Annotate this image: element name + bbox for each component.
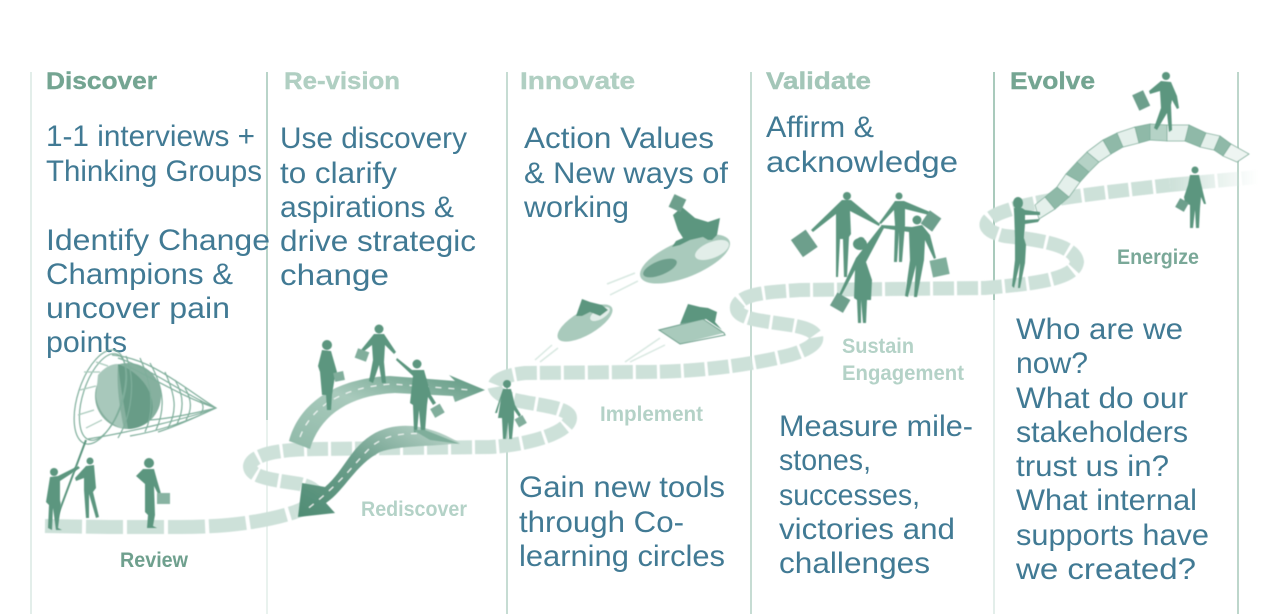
text block: Discover: points (46, 326, 127, 359)
text block: Implement notes: through Co- (519, 506, 684, 539)
figures on Evolve (1012, 72, 1206, 288)
column headings (46, 68, 1095, 95)
text block: Innovate: working (523, 191, 629, 224)
label: Sustain: Sustain (842, 335, 914, 358)
text block: Re-vision: aspirations & (280, 191, 454, 224)
heading: Re-vision: Re-vision (284, 68, 400, 95)
text block: Re-vision: change (280, 259, 389, 292)
text block: Evolve questions: stakeholders (1016, 416, 1188, 449)
text block: Discover: 1-1 interviews + (46, 120, 255, 153)
text block: Evolve questions: now? (1016, 347, 1088, 380)
illustration: Re-vision curved arrows (289, 375, 485, 517)
text block: Discover: Identify Change (46, 224, 270, 257)
large disc (634, 224, 736, 294)
label: Review: Review (120, 549, 189, 572)
text block: Evolve questions: What internal (1016, 484, 1197, 517)
winding road path (45, 177, 1258, 527)
illustration: Evolve zig-zag ribbon (1035, 124, 1249, 219)
small disc (552, 297, 618, 349)
upper arrow (289, 375, 485, 449)
text block: Evolve questions: trust us in? (1016, 450, 1169, 483)
text block: Re-vision: Use discovery (280, 122, 467, 155)
heading: Discover: Discover (46, 68, 157, 95)
carpet board (659, 319, 724, 344)
text block: Evolve questions: Who are we (1016, 313, 1183, 346)
label: Energize: Energize (1117, 246, 1199, 269)
text block: Discover (46, 120, 270, 359)
lower arrow (298, 426, 460, 517)
heading: Innovate: Innovate (520, 68, 635, 95)
text block: Sustain notes: successes, (779, 479, 920, 512)
heading: Evolve: Evolve (1010, 68, 1095, 95)
figures holding the net and walker (46, 458, 170, 530)
text block: Implement notes (519, 471, 725, 573)
figures on arrows (318, 324, 527, 444)
text block: Discover: uncover pain (46, 292, 230, 325)
text block: Sustain notes: stones, (779, 444, 871, 477)
text block: Sustain notes: challenges (779, 547, 930, 580)
speed lines (535, 273, 665, 362)
text block: Re-vision: drive strategic (280, 225, 476, 258)
label: Engagement: Engagement (842, 362, 964, 385)
briefcases (791, 210, 950, 313)
text block: Sustain notes (779, 410, 973, 580)
text block: Evolve questions: we created? (1015, 553, 1196, 586)
illustration: Innovate surfers on discs (535, 194, 736, 362)
text block: Discover: Champions & (46, 258, 233, 291)
text block: Evolve questions (1015, 313, 1209, 586)
text block: Re-vision: to clarify (280, 157, 397, 190)
road labels (120, 246, 1199, 572)
illustration: butterfly net with globe (56, 344, 216, 520)
text block: Re-vision (280, 122, 476, 292)
label: Rediscover: Rediscover (361, 498, 467, 521)
text block: Innovate: & New ways of (524, 157, 729, 190)
label: Implement: Implement (600, 403, 703, 426)
text block: Evolve questions: What do our (1016, 382, 1188, 415)
text block: Innovate (523, 122, 729, 224)
large surfer (672, 207, 720, 247)
text block: Validate (766, 111, 958, 179)
net handle (56, 440, 86, 520)
text block: Evolve questions: supports have (1016, 519, 1209, 552)
text block: Discover: Thinking Groups (46, 155, 262, 188)
text block: Innovate: Action Values (524, 122, 714, 155)
text block: Implement notes: learning circles (519, 540, 725, 573)
heading: Validate: Validate (766, 68, 871, 95)
text block: Sustain notes: Measure mile- (779, 410, 973, 443)
text block: Implement notes: Gain new tools (519, 471, 725, 504)
text block: Validate: acknowledge (766, 146, 958, 179)
illustration: Validate group joining hands (791, 192, 950, 323)
text block: Validate: Affirm & (766, 111, 874, 144)
text block: Sustain notes: victories and (779, 513, 955, 546)
